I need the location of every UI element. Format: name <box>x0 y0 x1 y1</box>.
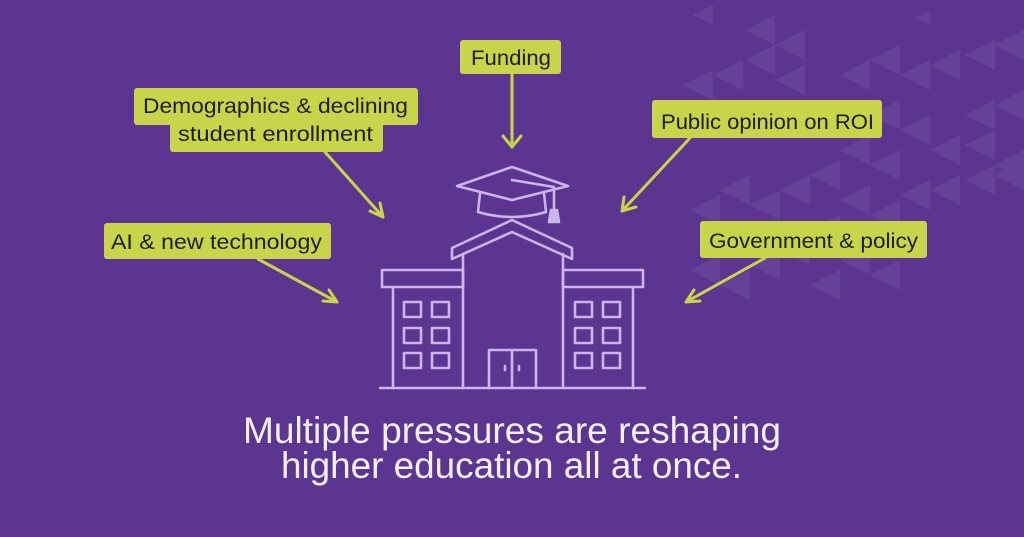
label: Public opinion: Public opinion on ROI <box>661 111 874 134</box>
label: Government <box>700 221 927 258</box>
windows <box>404 302 620 368</box>
label: Funding <box>460 40 561 74</box>
building icon <box>380 167 645 388</box>
label: Funding: Funding <box>471 47 551 70</box>
wings <box>382 270 463 287</box>
door <box>489 350 536 388</box>
arrows <box>258 74 765 302</box>
background triangle pattern <box>683 5 1024 300</box>
label: Demographics <box>134 88 418 152</box>
caption: higher education all at once. <box>281 445 742 486</box>
label: Demographics: student enrollment <box>178 123 373 146</box>
label: Demographics: Demographics & declining <box>143 95 408 118</box>
caption: Multiple pressures are reshaping <box>243 410 781 451</box>
label: AI: AI & new technology <box>111 231 323 254</box>
roof <box>452 220 572 259</box>
label: Public opinion <box>652 100 882 138</box>
central block <box>463 254 563 388</box>
icon: graduation cap <box>457 167 568 222</box>
caption <box>243 410 781 486</box>
label: Government: Government & policy <box>709 230 919 253</box>
label: AI <box>104 223 331 259</box>
